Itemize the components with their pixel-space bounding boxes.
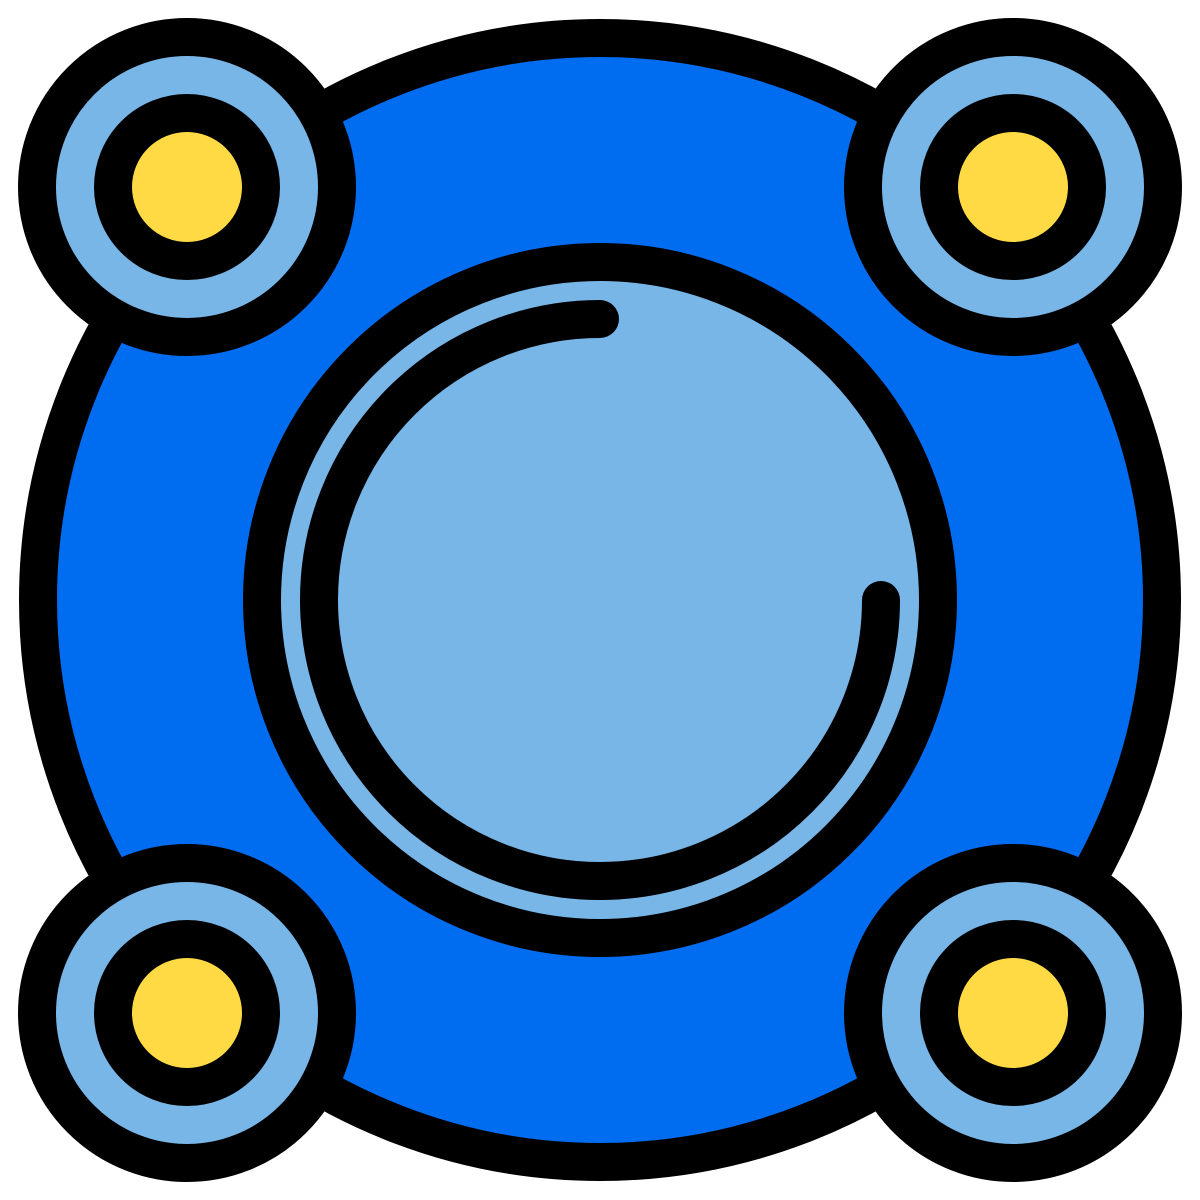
corner knob: top-right [863, 37, 1163, 337]
corner knob: bottom-right [863, 863, 1163, 1163]
corner knob: bottom-left [37, 863, 337, 1163]
corner knob: top-left [37, 37, 337, 337]
inner arc [319, 319, 881, 881]
center light blue circle [262, 262, 938, 938]
